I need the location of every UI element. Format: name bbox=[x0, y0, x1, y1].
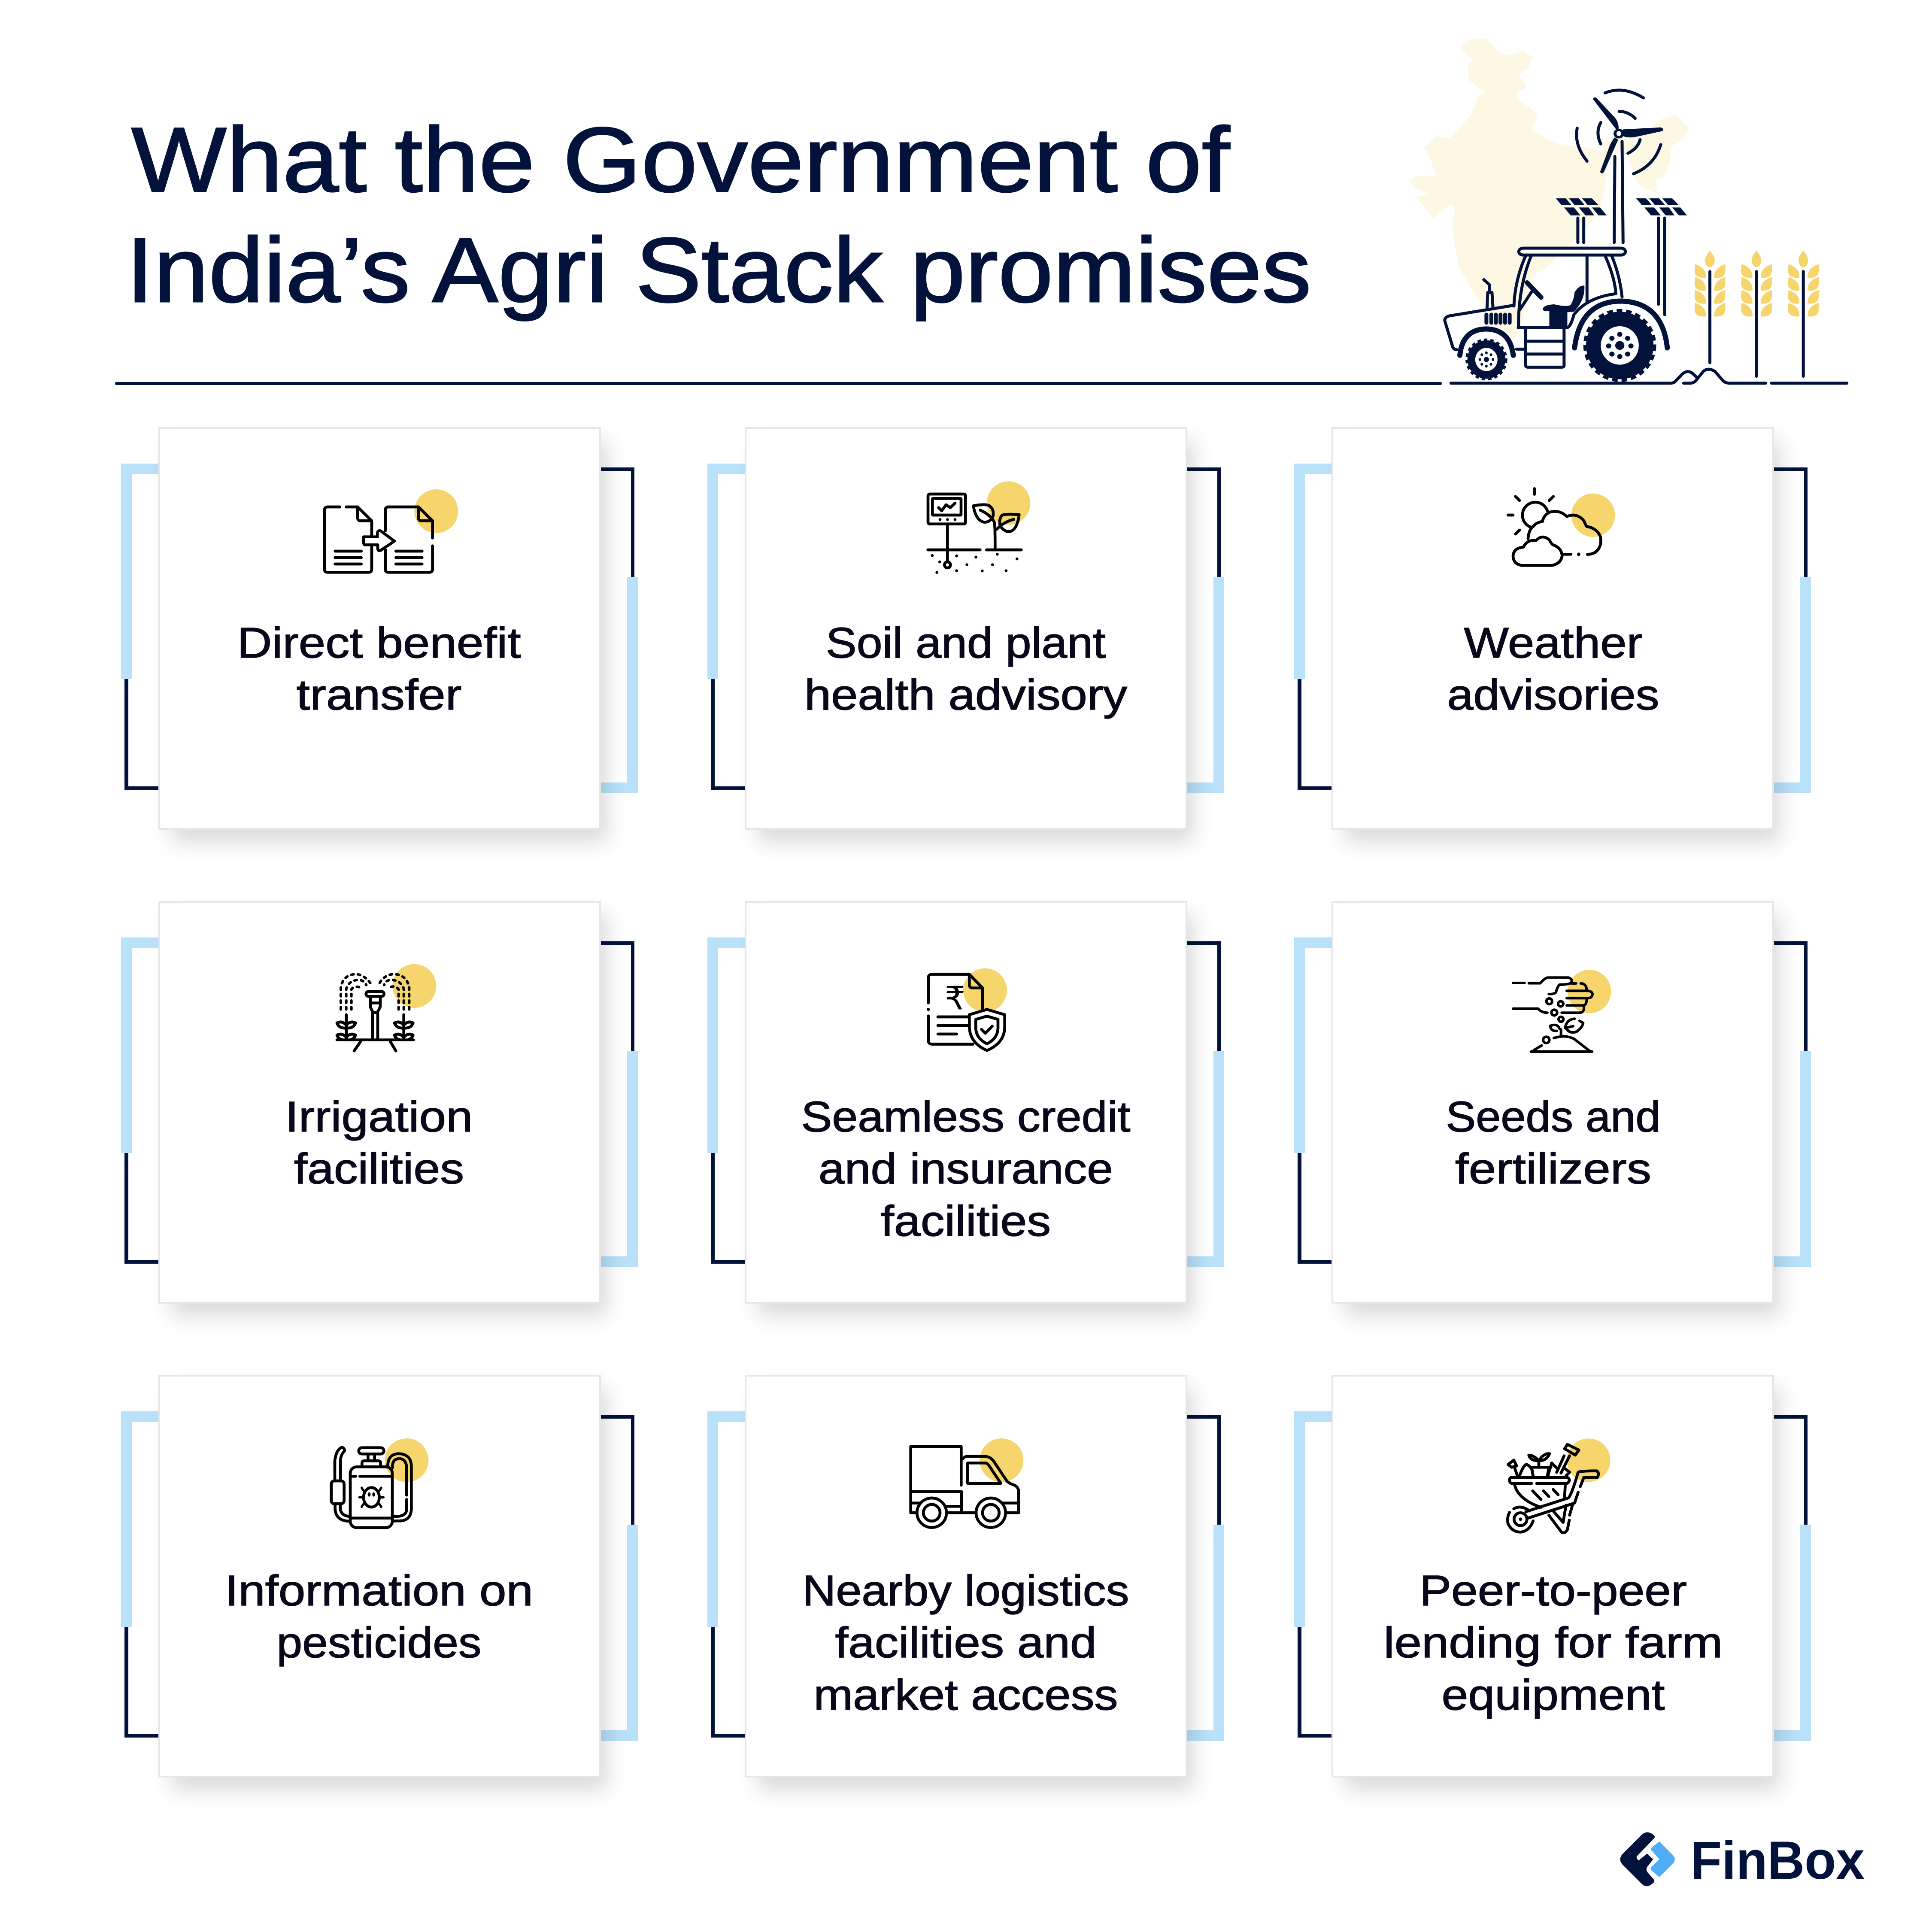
card box bbox=[746, 428, 1194, 843]
tractor bbox=[1445, 248, 1667, 380]
card: direct benefit transfer bbox=[121, 428, 638, 843]
label: and insurance bbox=[819, 1145, 1113, 1193]
label: facilities bbox=[881, 1197, 1051, 1245]
card: seeds and fertilizers bbox=[1294, 902, 1811, 1316]
card frame brackets bbox=[121, 937, 638, 1267]
logo: FinBox bbox=[1620, 1831, 1865, 1890]
ground line with hump bbox=[1451, 369, 1847, 383]
icon: delivery truck bbox=[911, 1438, 1023, 1528]
label bbox=[1384, 1567, 1723, 1719]
label bbox=[285, 1093, 473, 1193]
illustration: India map, tractor, wind turbine, solar panels and wheat bbox=[1409, 38, 1847, 383]
logo mark bbox=[1620, 1832, 1675, 1886]
label: lending for farm bbox=[1384, 1619, 1723, 1667]
label: facilities bbox=[294, 1145, 464, 1193]
logo wordmark: FinBox bbox=[1690, 1831, 1865, 1890]
label bbox=[225, 1567, 533, 1667]
card box bbox=[159, 1376, 607, 1790]
card frame brackets bbox=[121, 1411, 638, 1741]
label: advisories bbox=[1447, 671, 1659, 719]
icon: hand sowing seeds bbox=[1513, 970, 1611, 1052]
label: Soil and plant bbox=[826, 619, 1106, 667]
title: India’s Agri Stack promises bbox=[126, 219, 1311, 321]
India map silhouette bbox=[1409, 38, 1689, 342]
card box bbox=[159, 902, 607, 1316]
label: equipment bbox=[1441, 1671, 1665, 1719]
card frame brackets bbox=[707, 937, 1224, 1267]
label: health advisory bbox=[804, 671, 1127, 719]
card frame brackets bbox=[121, 464, 638, 793]
card: peer-to-peer lending for farm equipment bbox=[1294, 1376, 1811, 1790]
title rule bbox=[115, 382, 1442, 385]
label: Weather bbox=[1464, 619, 1642, 667]
label bbox=[803, 1567, 1129, 1719]
card: soil and plant health advisory bbox=[707, 428, 1224, 843]
title bbox=[126, 109, 1311, 321]
wind turbine bbox=[1577, 90, 1663, 243]
label: Nearby logistics bbox=[803, 1567, 1129, 1615]
card frame brackets bbox=[1294, 1411, 1811, 1741]
title: What the Government of bbox=[131, 109, 1230, 211]
card: seamless credit and insurance facilities bbox=[707, 902, 1224, 1316]
icon: pesticide sprayer bbox=[331, 1438, 428, 1528]
card box bbox=[1332, 902, 1780, 1316]
solar panels bbox=[1556, 198, 1687, 315]
card frame brackets bbox=[707, 1411, 1224, 1741]
label: Seeds and bbox=[1446, 1093, 1660, 1141]
icon: rupee document and shield: ₹ bbox=[945, 980, 965, 1017]
card: irrigation facilities bbox=[121, 902, 638, 1316]
label: Direct benefit bbox=[237, 619, 521, 667]
label bbox=[237, 619, 521, 719]
card box bbox=[746, 902, 1194, 1316]
label bbox=[1446, 1093, 1660, 1193]
card box bbox=[1332, 1376, 1780, 1790]
icon: wheelbarrow with tools bbox=[1507, 1438, 1611, 1533]
label: transfer bbox=[296, 671, 462, 719]
icon: documents transfer bbox=[325, 489, 458, 572]
label bbox=[1447, 619, 1659, 719]
label: Seamless credit bbox=[801, 1093, 1131, 1141]
card: nearby logistics facilities and market access bbox=[707, 1376, 1224, 1790]
label: fertilizers bbox=[1455, 1145, 1651, 1193]
label: Peer-to-peer bbox=[1419, 1567, 1687, 1615]
label: pesticides bbox=[276, 1619, 482, 1667]
label: Irrigation bbox=[285, 1093, 473, 1141]
card frame brackets bbox=[1294, 937, 1811, 1267]
card box bbox=[746, 1376, 1194, 1790]
card box bbox=[159, 428, 607, 843]
label: market access bbox=[814, 1671, 1118, 1719]
card: information on pesticides bbox=[121, 1376, 638, 1790]
icon: soil sensor and plant bbox=[928, 481, 1030, 574]
icon: sprinkler bbox=[337, 964, 436, 1051]
card frame brackets bbox=[707, 464, 1224, 793]
card: weather advisories bbox=[1294, 428, 1811, 843]
label bbox=[801, 1093, 1131, 1245]
label bbox=[804, 619, 1127, 719]
card frame brackets bbox=[1294, 464, 1811, 793]
icon: rupee document and shield bbox=[927, 968, 1007, 1050]
card box bbox=[1332, 428, 1780, 843]
icon: sun and clouds bbox=[1508, 488, 1615, 565]
label: Information on bbox=[225, 1567, 533, 1615]
label: facilities and bbox=[835, 1619, 1096, 1667]
wheat stalks bbox=[1695, 251, 1819, 376]
